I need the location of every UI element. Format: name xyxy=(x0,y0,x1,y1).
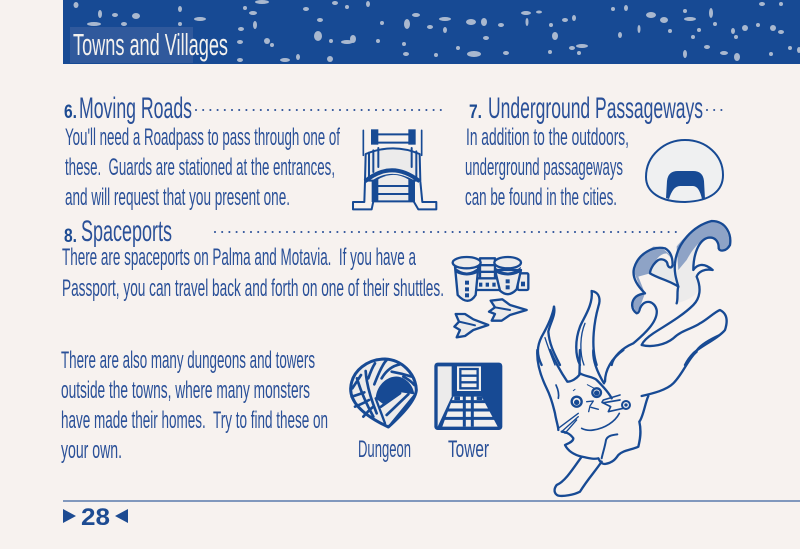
paragraph: dungeons and towers: have made their homes. Try to find these on xyxy=(61,407,328,434)
paragraph: dungeons and towers: There are also many dungeons and towers xyxy=(61,347,315,374)
title banner xyxy=(63,0,800,64)
icon: moving road gate xyxy=(353,129,436,209)
icon: spaceport and shuttles xyxy=(453,257,528,337)
page number xyxy=(63,504,128,531)
section 8 heading: 8. xyxy=(64,226,77,247)
section 7 text: underground passageways xyxy=(465,154,623,181)
section 7 text: can be found in the cities. xyxy=(465,184,617,211)
tail and upper body xyxy=(538,221,730,365)
section 6 text xyxy=(65,124,340,211)
paragraph: dungeons and towers xyxy=(61,347,328,464)
section 7 text: In addition to the outdoors, xyxy=(466,124,629,151)
section 8 text xyxy=(62,244,444,302)
section 7 heading: 7. xyxy=(469,102,482,123)
head and lower body xyxy=(537,350,697,496)
section 7 text xyxy=(465,124,629,211)
icon: tower xyxy=(434,363,502,430)
banner title: Towns and Villages xyxy=(73,27,228,62)
section 6 heading xyxy=(64,92,447,125)
label: Tower: Tower xyxy=(448,436,489,463)
section 6 text: You'll need a Roadpass to pass through one of xyxy=(65,124,340,151)
footer rule xyxy=(63,500,800,502)
section 8 text: There are spaceports on Palma and Motavia. If you have a xyxy=(62,244,416,271)
section 8 heading xyxy=(64,215,678,248)
section 6 heading: Moving Roads xyxy=(79,92,192,125)
section 8 heading: Spaceports xyxy=(81,215,172,248)
section 8 text: Passport, you can travel back and forth on one of their shuttles. xyxy=(62,275,444,302)
label: Dungeon: Dungeon xyxy=(358,436,411,463)
section 6 text: these. Guards are stationed at the entrances, xyxy=(65,154,335,181)
page number: 28 xyxy=(81,504,110,531)
paragraph: dungeons and towers: outside the towns, where many monsters xyxy=(61,377,310,404)
section 6 heading: 6. xyxy=(64,102,77,123)
icon: dungeon xyxy=(351,359,416,427)
icon: underground passage xyxy=(646,140,723,202)
illustration: long-eared rabbit creature xyxy=(537,221,730,496)
paragraph: dungeons and towers: your own. xyxy=(61,437,122,464)
section 6 text: and will request that you present one. xyxy=(65,184,290,211)
